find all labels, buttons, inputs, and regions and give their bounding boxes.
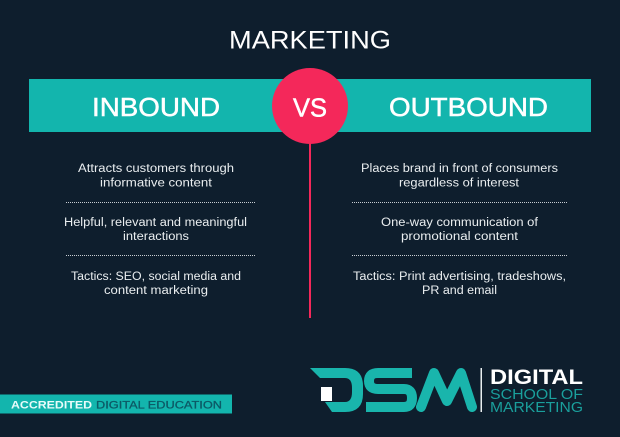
icon: M letter	[421, 373, 472, 407]
outbound list: promotional content	[401, 231, 519, 243]
outbound list: PR and email	[422, 285, 497, 297]
vs badge: VS	[293, 92, 327, 122]
title: MARKETING	[229, 26, 391, 54]
inbound list: informative content	[100, 178, 213, 190]
logo wordmark	[490, 366, 583, 416]
accreditation badge: DIGITAL EDUCATION	[96, 400, 222, 412]
heading: outbound: OUTBOUND	[389, 92, 548, 122]
outbound list	[352, 163, 568, 297]
inbound list: Attracts customers through	[78, 163, 234, 175]
accreditation badge: ACCREDITED	[11, 400, 92, 412]
accreditation badge	[0, 394, 232, 414]
outbound list: Tactics: Print advertising, tradeshows,	[353, 271, 566, 283]
outbound list: Places brand in front of consumers	[361, 163, 558, 175]
comparison banner	[29, 79, 591, 132]
logo: DSM	[310, 368, 472, 412]
vs badge	[272, 68, 348, 144]
logo wordmark: SCHOOL OF	[490, 386, 583, 403]
inbound list: Tactics: SEO, social media and	[71, 271, 241, 283]
inbound list: content marketing	[104, 285, 208, 297]
logo wordmark: MARKETING	[490, 399, 583, 416]
icon: D letter	[310, 368, 363, 412]
center divider line	[309, 140, 311, 318]
outbound list: regardless of interest	[399, 178, 520, 190]
inbound list: Helpful, relevant and meaningful	[64, 217, 247, 229]
logo divider	[480, 368, 482, 412]
heading: inbound: INBOUND	[92, 92, 220, 122]
icon: S letter	[366, 373, 412, 407]
outbound list: One-way communication of	[381, 217, 539, 229]
logo wordmark: DIGITAL	[490, 366, 583, 389]
inbound list	[64, 163, 255, 297]
icon: white square	[321, 387, 332, 401]
inbound list: interactions	[123, 231, 189, 243]
